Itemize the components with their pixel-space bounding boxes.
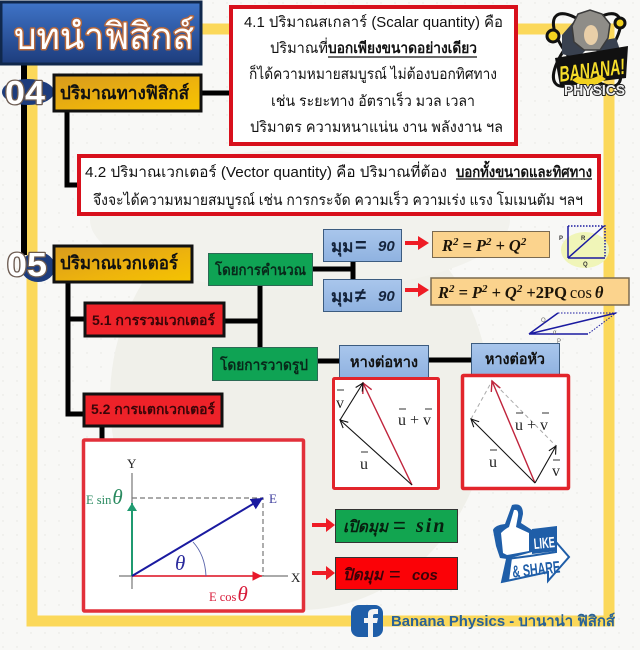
box: open angle equals sin: [336, 510, 458, 542]
formula: right angle: 2: [520, 236, 527, 248]
box: open angle equals sin: เปิดมุม: [343, 518, 389, 537]
footer: page name: Banana Physics - บานาน่า ฟิสิกส์: [391, 612, 616, 630]
box: angle equals 90: มุม: [331, 237, 353, 257]
panel: vector resolution diagram: E: [269, 491, 277, 506]
panel: vector quantity: 4.2 ปริมาณเวกเตอร์ (Vector quantity) คือ ปริมาณที่ต้อง: [85, 161, 447, 181]
box: 5.1 vector addition: 5.1 การรวมเวกเตอร์: [92, 312, 215, 328]
formula: right angle: [432, 232, 550, 258]
box: by calculation: โดยการคำนวณ: [214, 260, 306, 279]
panel: vector quantity: บอกทั้งขนาดและทิศทาง: [456, 160, 592, 181]
section number 04: 04: [5, 74, 46, 111]
formula: right angle: Q: [509, 236, 521, 255]
diagram: parallelogram vector sum: Q: [541, 318, 546, 324]
diagram: parallelogram vector sum: [529, 313, 616, 345]
box: angle not equal 90: [324, 280, 402, 312]
formula: general: +2PQ: [526, 283, 567, 302]
diagram: right angle vector sum: [559, 226, 609, 268]
box: closed angle equals cos: [336, 558, 458, 590]
arrow: to right angle formula: [405, 236, 429, 250]
box: angle not equal 90: มุม: [331, 287, 353, 307]
arrow: to general formula: [405, 283, 429, 297]
label: tail to head: หางต่อหัว: [485, 351, 545, 368]
formula: right angle: +: [496, 236, 505, 255]
heading: physical quantities: [54, 75, 201, 111]
heading: physical quantities: ปริมาณทางฟิสิกส์: [60, 82, 190, 103]
formula: general: R: [438, 283, 449, 302]
formula: general: Q: [505, 283, 517, 302]
box: closed angle equals cos: =: [389, 564, 401, 586]
icon: facebook: [351, 605, 383, 637]
diagram: right angle vector sum: P: [559, 236, 563, 242]
formula: right angle: =: [463, 236, 472, 255]
arrow: to cosine rule: [312, 566, 335, 580]
formula: general: [431, 278, 629, 305]
panel: tail to tail diagram: [334, 378, 438, 488]
diagram: parallelogram vector sum: α: [553, 330, 557, 336]
panel: tail to head diagram: u + v: [515, 417, 548, 434]
formula: general: cosθ: [570, 283, 604, 302]
box: open angle equals sin: =: [393, 513, 406, 538]
formula: right angle: R: [442, 236, 453, 255]
panel: scalar quantity: 4.1 ปริมาณสเกลาร์ (Scalar quantity) คือ: [244, 14, 503, 31]
panel: tail to tail diagram: u: [360, 456, 368, 473]
box: open angle equals sin: sin: [415, 515, 446, 537]
formula: right angle: P: [475, 236, 487, 255]
box: angle equals 90: =: [355, 235, 367, 257]
icon: like and share: [493, 504, 569, 582]
heading: vector quantity: [54, 246, 192, 282]
diagram: parallelogram vector sum: P: [557, 339, 561, 345]
formula: general: 2: [516, 283, 523, 295]
formula: general: +: [492, 283, 501, 302]
panel: scalar quantity: ปริมาณที่: [270, 37, 328, 57]
formula: right angle: 2: [485, 236, 492, 248]
panel: vector resolution diagram: E sinθ: [86, 485, 123, 509]
panel: tail to head diagram: v: [552, 463, 560, 480]
panel: scalar quantity: บอกเพียงขนาดอย่างเดียว: [328, 40, 477, 57]
icon: like and share: LIKE: [533, 534, 556, 553]
section number 05: 05: [7, 246, 47, 283]
formula: right angle: 2: [452, 236, 459, 248]
box: closed angle equals cos: cos: [412, 567, 438, 584]
connector lines: [24, 64, 473, 442]
box: angle equals 90: [324, 230, 402, 262]
panel: vector quantity: จึงจะได้ความหมายสมบูรณ์ เช่น การกระจัด ความเร็ว ความเร่ง แรง โมเมนตัม ฯลฯ: [93, 190, 583, 209]
panel: scalar quantity: [231, 7, 516, 144]
panel: tail to tail diagram: u + v: [398, 412, 431, 429]
panel: vector quantity: [79, 156, 599, 214]
panel: tail to head diagram: [462, 376, 568, 488]
logo: Banana Physics: PHYSICS: [564, 82, 625, 99]
formula: general: P: [471, 283, 483, 302]
box: 5.1 vector addition: [85, 303, 224, 336]
panel: vector resolution diagram: [84, 440, 304, 611]
panel: tail to head diagram: u: [489, 454, 497, 471]
diagram: right angle vector sum: R: [581, 236, 586, 242]
formula: general: 2: [481, 283, 488, 295]
panel: vector resolution diagram: E cosθ: [209, 582, 248, 606]
panel: vector resolution diagram: X: [291, 570, 301, 585]
box: 5.2 vector resolution: [84, 394, 222, 426]
label: tail to tail: [340, 346, 428, 378]
label: tail to tail: หางต่อหาง: [350, 354, 418, 371]
formula: general: =: [459, 283, 468, 302]
icon: like and share: & SHARE: [511, 558, 561, 582]
logo: Banana Physics: [543, 4, 631, 99]
panel: scalar quantity: เช่น ระยะทาง อัตราเร็ว มวล เวลา: [271, 91, 475, 110]
box: angle not equal 90: ≠: [355, 285, 366, 307]
diagram: right angle vector sum: Q: [583, 262, 588, 268]
panel: scalar quantity: ก็ได้ความหมายสมบูรณ์ ไม่ต้องบอกทิศทาง: [249, 64, 497, 83]
box: angle not equal 90: 90: [378, 288, 395, 305]
title banner: บทนำฟิสิกส์: [14, 16, 194, 57]
panel: vector resolution diagram: θ: [175, 551, 185, 575]
box: by calculation: [208, 254, 312, 286]
panel: vector resolution diagram: Y: [127, 456, 137, 471]
panel: scalar quantity: ปริมาตร ความหนาแน่น งาน พลังงาน ฯล: [250, 119, 503, 136]
arrow: to sine rule: [312, 518, 335, 532]
box: angle equals 90: 90: [378, 238, 395, 255]
panel: tail to tail diagram: v: [336, 395, 344, 412]
formula: general: 2: [448, 283, 455, 295]
label: tail to head: [472, 344, 560, 376]
box: closed angle equals cos: ปิดมุม: [343, 566, 384, 585]
box: by drawing: โดยการวาดรูป: [219, 355, 308, 375]
box: 5.2 vector resolution: 5.2 การแตกเวกเตอร์: [91, 401, 215, 417]
heading: vector quantity: ปริมาณเวกเตอร์: [60, 252, 178, 273]
box: by drawing: [212, 348, 318, 380]
title banner: [1, 2, 201, 64]
